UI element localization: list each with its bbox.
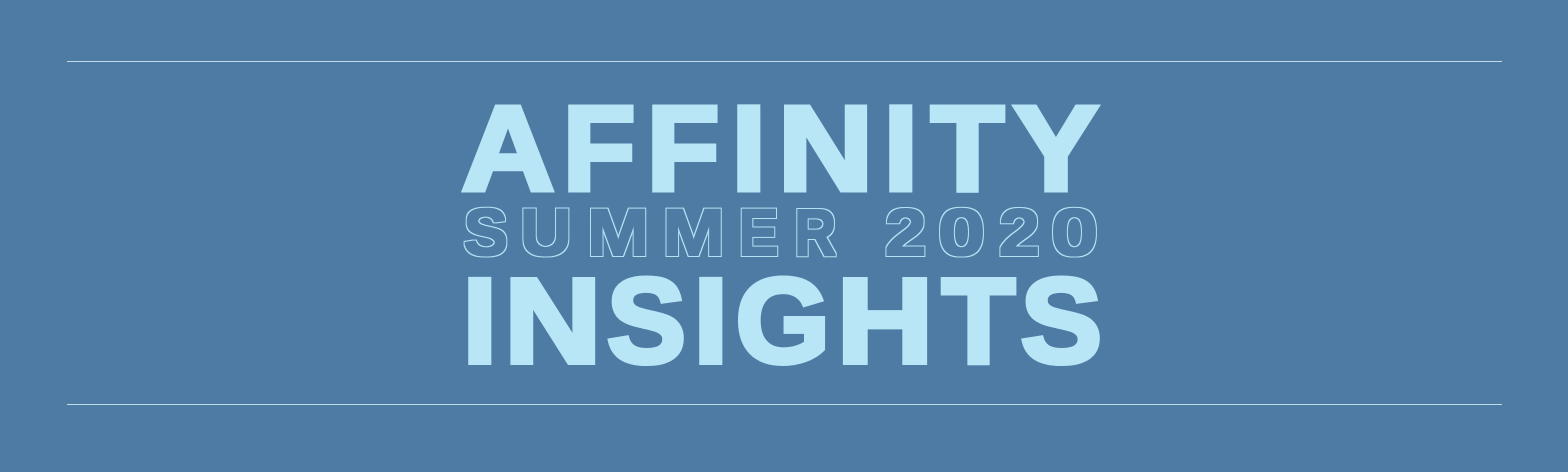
heading: Insights: G xyxy=(736,254,830,388)
heading: Affinity: I xyxy=(884,81,918,216)
heading: Affinity: I xyxy=(732,81,766,216)
subheading: Summer 2020 outlined: 0 xyxy=(1051,196,1098,269)
heading: Insights: S xyxy=(607,254,686,388)
subheading: Summer 2020 outlined: U xyxy=(520,196,572,269)
heading: Affinity: A xyxy=(462,81,554,216)
heading: Affinity: T xyxy=(931,81,1004,216)
heading: Affinity: N xyxy=(778,81,873,216)
heading: Affinity: F xyxy=(563,81,636,216)
subheading: Summer 2020 outlined: S xyxy=(464,196,508,269)
heading: Insights: I xyxy=(462,254,497,388)
heading: Insights: S xyxy=(1021,254,1102,388)
subheading: Summer 2020 outlined: 2 xyxy=(999,196,1040,269)
heading: Affinity: F xyxy=(647,81,720,216)
subheading: Summer 2020 outlined: R xyxy=(794,196,836,269)
subheading: Summer 2020 outlined: M xyxy=(587,196,649,269)
heading: Insights: T xyxy=(942,254,1015,388)
subheading: Summer 2020 outlined: E xyxy=(739,196,779,269)
subheading: Summer 2020 outlined: 0 xyxy=(938,196,986,269)
heading: Insights: N xyxy=(504,254,602,388)
heading: Insights: H xyxy=(837,254,933,388)
subheading: Summer 2020 outlined: 2 xyxy=(885,196,926,269)
heading: Affinity: Y xyxy=(1014,81,1098,216)
subheading: Summer 2020 outlined: M xyxy=(662,196,725,269)
heading: Insights: I xyxy=(694,254,728,388)
